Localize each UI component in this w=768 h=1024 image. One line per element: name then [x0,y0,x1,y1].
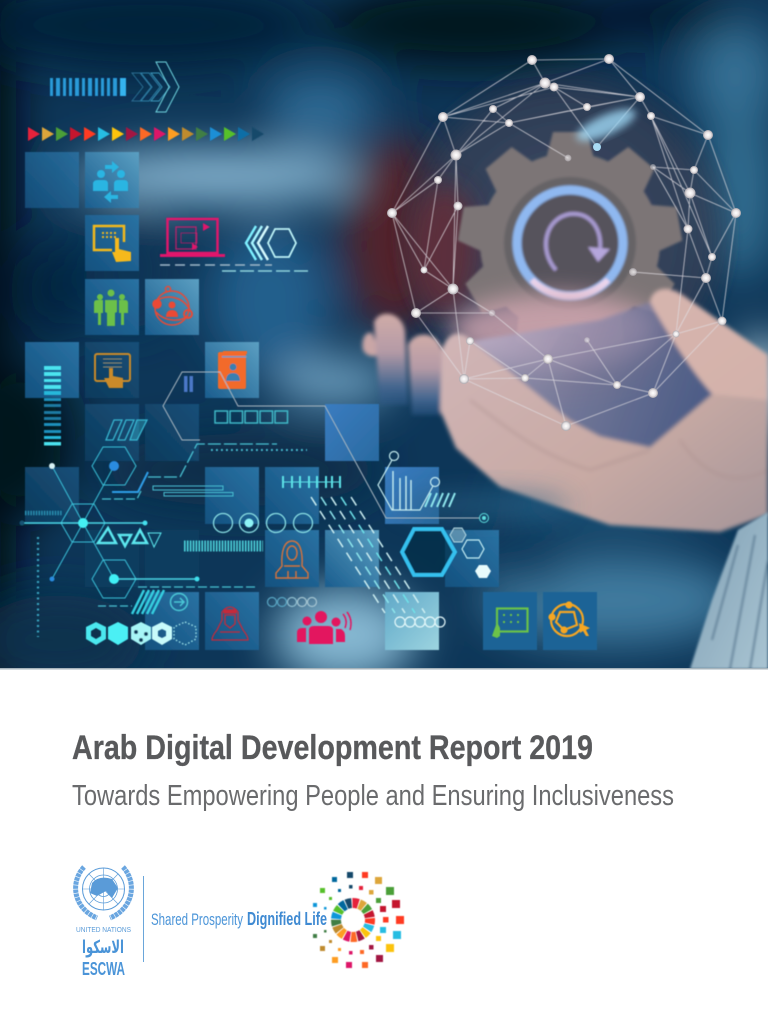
sleeve [690,512,768,669]
triangles row [98,528,161,547]
SDG triangle row [28,127,264,141]
H-bar strip [283,476,340,488]
four circles [214,514,312,532]
icon: magenta laptop [160,219,225,257]
end target [480,514,488,522]
ESCWA wordmark: ESCWA [82,958,125,979]
tile grid [25,152,597,650]
icon: pink group with sound [297,611,351,644]
blue flare above gear [573,103,639,147]
icon: yellow tablet and hand [94,226,131,262]
dashed lines [160,265,310,271]
bar chart outline icon [378,452,440,510]
white circuit line [163,372,480,518]
logo divider [143,876,144,962]
image bottom edge [0,668,768,670]
polygon network sphere [387,54,741,431]
icon: tablet with hand [95,354,130,388]
small hexagons [450,528,491,578]
icon: orange contact book [218,351,247,389]
hexagon network [20,447,200,598]
ESCWA logo [76,867,131,979]
hexagon row [86,622,196,645]
chevron arrows [132,62,179,112]
five white circles [395,617,445,627]
dark sphere behind gear [397,68,736,342]
icon: red network globe [153,286,192,325]
icon: green group [94,290,128,326]
icon: orange globe cursor [550,602,590,636]
icon: arrow circle [170,594,188,610]
red glow left of gear [411,185,479,315]
large hexagon [402,529,455,575]
gap between fingers and thumb [472,302,712,447]
icon: vertical bar stack [44,366,61,446]
icon: man in keffiyeh [212,607,248,640]
overlay icons [20,62,590,645]
tagline: Dignified Life [247,909,327,929]
pink wash over gear base [450,294,660,366]
blurred background [0,0,768,710]
hero image panel [0,0,768,710]
icon: people exchange [93,161,128,203]
Arabic wordmark: الاسكوا [82,937,124,958]
open hand [362,289,768,532]
title: Arab Digital Development Report 2019 [72,729,593,767]
barcode horizontal [184,540,263,552]
tagline: Shared Prosperity [151,910,243,929]
icon: green screen and hand [492,608,528,638]
UNITED NATIONS label: UNITED NATIONS [76,927,131,934]
SDG wheel [313,872,404,968]
palm and long finger [440,289,768,532]
colour ring [336,903,370,937]
dashed circuit and dots [98,444,307,606]
icon: hexagon and chevrons [246,226,296,260]
barcode strip [50,78,126,96]
slanted stripe block [132,590,164,614]
gear with refresh symbol [457,132,683,356]
UN emblem [76,867,131,918]
left fingers [362,314,446,415]
slanted parallelograms [106,420,147,440]
five small circles [268,598,316,606]
fade on lower hand edge [400,489,570,521]
five squares [215,411,288,423]
diagonal stripes [425,493,455,507]
finger creases [470,400,768,478]
small bars and dotted line [25,513,62,637]
icon: woman in hijab [276,541,308,578]
thumb highlight [650,289,768,400]
slanted dash field [311,497,425,613]
scattered squares [313,872,404,968]
icon: pause bars [184,376,193,392]
